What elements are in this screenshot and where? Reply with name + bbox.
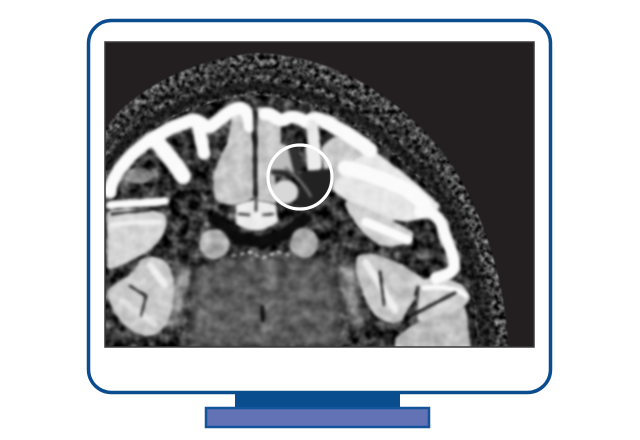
- dark sulci: [112, 112, 455, 316]
- monitor illustration: [86, 18, 552, 428]
- brain interior: [105, 90, 505, 347]
- scalp and skull rings: [105, 42, 534, 347]
- monitor frame: [88, 20, 550, 392]
- deep brain structures: [190, 258, 340, 347]
- mottled tissue texture: [106, 96, 474, 346]
- medial and inner grey gyri: [110, 108, 468, 347]
- lesion region inside circle: [270, 145, 332, 210]
- corpus arc and central nuclei: [199, 200, 318, 322]
- screen with brain scan: [105, 42, 534, 347]
- monitor stand neck: [235, 390, 400, 409]
- monitor base: [206, 408, 429, 427]
- bright cortex bands: [110, 108, 466, 325]
- highlight circle: [268, 145, 332, 209]
- screen border: [105, 42, 534, 347]
